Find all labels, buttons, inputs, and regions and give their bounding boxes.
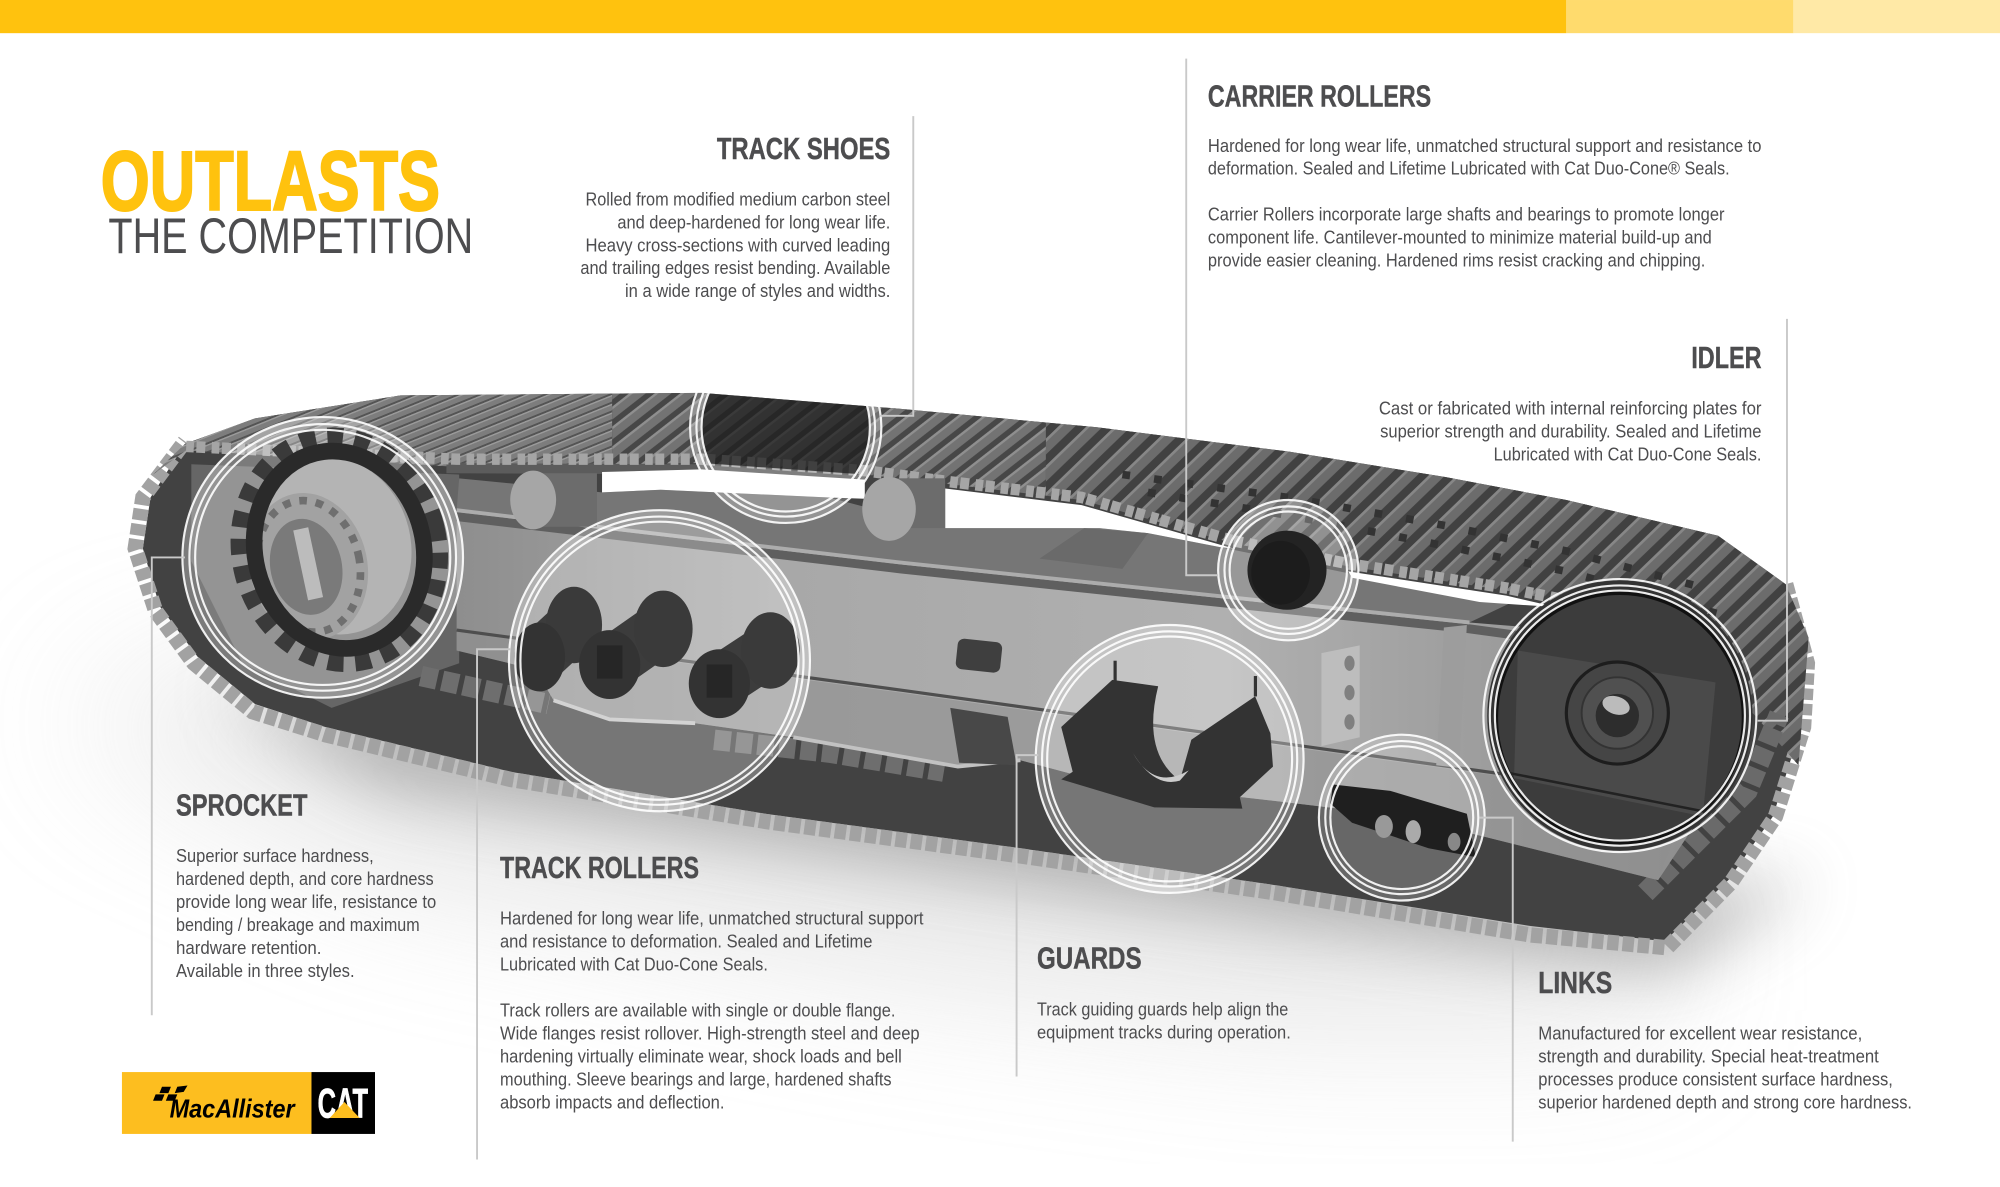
body: sprocket: hardened depth, and core hardness: [176, 868, 434, 889]
body: links: [1538, 1023, 1912, 1112]
frame lower lip right: [793, 737, 1020, 767]
frame flange: [457, 510, 1582, 644]
support roller left: [510, 471, 597, 529]
outer track teeth: [135, 441, 1807, 948]
title: [101, 134, 473, 264]
sprocket hole: [238, 441, 430, 651]
body: sprocket: hardware retention.: [176, 937, 321, 958]
callout circle: sprocket: [182, 417, 463, 698]
top track shoes: right section: [1046, 422, 1809, 765]
text block: track rollers: [500, 851, 923, 1112]
body: links: strength and durability. Special heat-treatment: [1538, 1046, 1879, 1067]
track shoe front rail: [186, 446, 1582, 603]
frame lower seam: [457, 630, 1687, 800]
frame deck: [457, 478, 1518, 622]
body: track shoes: and trailing edges resist bending. Available: [580, 257, 890, 278]
body: links: superior hardened depth and strong core hardness.: [1538, 1091, 1912, 1112]
body: track rollers: Track rollers are available with single or double flange.: [500, 1000, 895, 1021]
body: track rollers: mouthing. Sleeve bearings and large, hardened shafts: [500, 1068, 892, 1089]
roller 2: [579, 591, 693, 699]
body: idler: [1379, 398, 1761, 464]
body: guards: [1037, 998, 1291, 1042]
sprocket ring: [218, 417, 460, 682]
body: sprocket: [176, 845, 436, 981]
body: carrier rollers: [1208, 135, 1761, 271]
heading: idler: IDLER: [1691, 341, 1761, 375]
support roller right: [862, 477, 945, 541]
text block: guards: [1037, 942, 1291, 1042]
frame lower skirt: [457, 633, 1687, 880]
gaps in track loop: [602, 469, 1556, 607]
title: THE COMPETITION: [108, 208, 473, 264]
carrier roller: [1247, 531, 1327, 610]
callout circle: track shoes: [689, 392, 882, 524]
body: idler: Lubricated with Cat Duo-Cone Seals.: [1494, 443, 1761, 464]
body: idler: Cast or fabricated with internal reinforcing plates for: [1379, 398, 1761, 419]
guard bracket: [1061, 661, 1273, 809]
top colour bar: [0, 0, 2000, 33]
left end inner dark band: [191, 464, 459, 708]
deck plate: [1040, 528, 1148, 569]
lower rollers row left: [421, 676, 548, 704]
frame lower recess: [950, 708, 1017, 765]
lower rollers row mid: [714, 740, 944, 772]
body: guards: Track guiding guards help align the: [1037, 998, 1288, 1019]
body: track rollers: hardening virtually eliminate wear, shock loads and bell: [500, 1046, 902, 1067]
body: sprocket: Available in three styles.: [176, 960, 355, 981]
wordmark: CAT: [318, 1079, 368, 1126]
jagged back edge of shoes: [185, 388, 1786, 579]
body: carrier rollers: provide easier cleaning. Hardened rims resist cracking and chipping.: [1208, 250, 1705, 271]
body: track rollers: and resistance to deformation. Sealed and Lifetime: [500, 931, 872, 952]
body: sprocket: bending / breakage and maximum: [176, 914, 420, 935]
body: carrier rollers: component life. Cantilever-mounted to minimize material build-up and: [1208, 227, 1712, 248]
body: idler: superior strength and durability. Sealed and Lifetime: [1380, 421, 1761, 442]
body: track rollers: Hardened for long wear life, unmatched structural support: [500, 908, 923, 929]
heading: track shoes: TRACK SHOES: [717, 132, 890, 166]
body: track rollers: [500, 908, 923, 1112]
icon: checkered flag: [153, 1085, 188, 1101]
heading: track rollers: TRACK ROLLERS: [500, 851, 699, 885]
text block: carrier rollers: [1208, 80, 1761, 271]
body: links: Manufactured for excellent wear resistance,: [1538, 1023, 1862, 1044]
top track shoes: middle section: [612, 393, 1046, 496]
callout circle: idler: [1483, 579, 1756, 852]
text block: idler: [1379, 341, 1761, 464]
body: carrier rollers: Hardened for long wear life, unmatched structural support and resistance to: [1208, 135, 1761, 156]
wordmark: CAT: CAT: [318, 1079, 368, 1126]
bolted plate: [1321, 645, 1360, 746]
body: carrier rollers: Carrier Rollers incorporate large shafts and bearings to promote longer: [1208, 204, 1724, 225]
callout circle: links: [1319, 735, 1485, 901]
sprocket hub: [236, 482, 381, 651]
logo: MacAllister Cat: [122, 1072, 375, 1134]
roller 1: [514, 587, 602, 691]
text block: sprocket: [176, 789, 436, 981]
body: track rollers: absorb impacts and deflection.: [500, 1091, 724, 1112]
link chain: [1330, 784, 1476, 857]
body: links: processes produce consistent surface hardness,: [1538, 1068, 1893, 1089]
heading: guards: GUARDS: [1037, 942, 1142, 976]
frame web: [457, 510, 1735, 880]
top track shoes: left section: [154, 394, 612, 474]
body: carrier rollers: deformation. Sealed and Lifetime Lubricated with Cat Duo-Cone® Seals.: [1208, 158, 1730, 179]
frame lower lip: [554, 700, 695, 723]
body: guards: equipment tracks during operation.: [1037, 1021, 1291, 1042]
undercarriage illustration: [128, 370, 1837, 948]
roller 3: [689, 612, 800, 718]
text block: links: [1538, 966, 1912, 1112]
title: OUTLASTS: [101, 134, 440, 228]
ground shadow: [51, 663, 1811, 1020]
body: track shoes: and deep-hardened for long wear life.: [617, 211, 890, 232]
heading: links: LINKS: [1538, 966, 1612, 1000]
track chain under rail: [446, 468, 865, 481]
body: track rollers: Lubricated with Cat Duo-Cone Seals.: [500, 954, 768, 975]
body: track shoes: [580, 188, 890, 301]
track silhouette: [143, 393, 1805, 941]
text block: track shoes: [580, 132, 890, 301]
lower rollers row right: [1645, 714, 1779, 893]
body: track rollers: Wide flanges resist rollover. High-strength steel and deep: [500, 1023, 920, 1044]
callout circle: track rollers: [509, 510, 810, 811]
frame vertical rib: [1436, 625, 1467, 768]
body: track shoes: Rolled from modified medium carbon steel: [585, 188, 890, 209]
callout circle: carrier roller: [1218, 500, 1358, 640]
rings: [182, 417, 463, 698]
leader lines: [152, 59, 1787, 1159]
wordmark: MacAllister: MacAllister: [170, 1095, 297, 1123]
callout circle: guards: [1036, 625, 1304, 893]
idler wheel: [1487, 580, 1753, 851]
side slot: [955, 638, 1003, 673]
body: track shoes: in a wide range of styles and widths.: [625, 280, 890, 301]
body: sprocket: Superior surface hardness,: [176, 845, 374, 866]
body: sprocket: provide long wear life, resistance to: [176, 891, 436, 912]
heading: sprocket: SPROCKET: [176, 789, 308, 823]
heading: carrier rollers: CARRIER ROLLERS: [1208, 80, 1431, 114]
body: track shoes: Heavy cross-sections with curved leading: [585, 234, 890, 255]
